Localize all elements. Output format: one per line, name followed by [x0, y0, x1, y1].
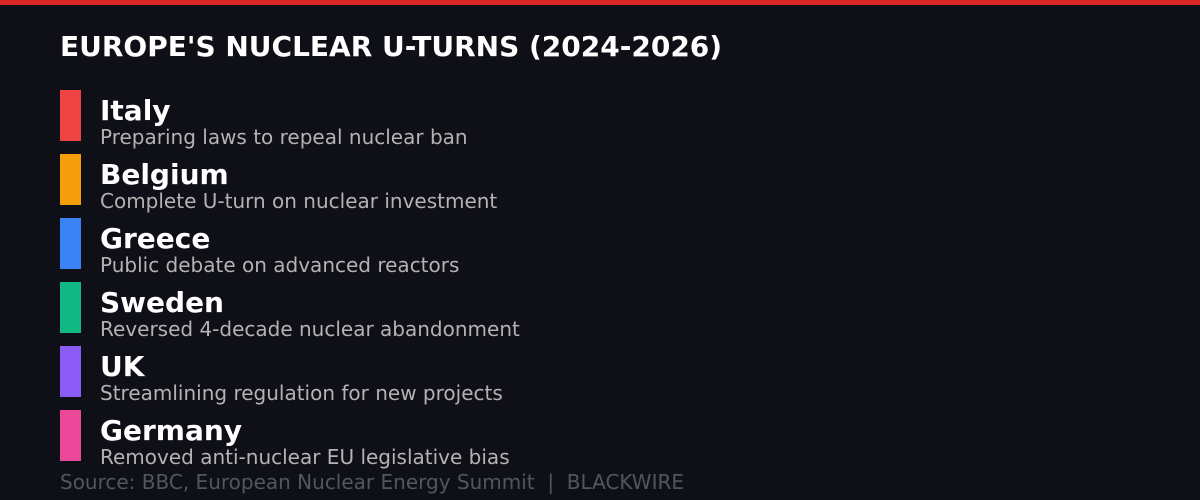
- footer source: Source: BBC, European Nuclear Energy Summit | BLACKWIRE: [60, 470, 684, 494]
- row: Italy: Italy: [100, 94, 171, 127]
- row: Sweden: Reversed 4-decade nuclear abandonment: [100, 317, 520, 341]
- row: UK: UK: [100, 350, 144, 383]
- row: UK: Streamlining regulation for new projects: [100, 381, 503, 405]
- row: Greece: [60, 218, 459, 277]
- row: Germany: Germany: [100, 414, 242, 447]
- row: Italy: [60, 90, 468, 149]
- title: EUROPE'S NUCLEAR U-TURNS (2024-2026): [60, 30, 722, 63]
- top accent bar: [0, 0, 1200, 5]
- row: Italy: Preparing laws to repeal nuclear ban: [100, 125, 468, 149]
- row: Belgium: Belgium: [100, 158, 229, 191]
- row: Belgium: [60, 154, 497, 213]
- row: UK: [60, 346, 503, 405]
- row: Sweden: [60, 282, 520, 341]
- row: Germany: Removed anti-nuclear EU legislative bias: [100, 445, 510, 469]
- row: Greece: Greece: [100, 222, 210, 255]
- row: Belgium: Complete U-turn on nuclear investment: [100, 189, 497, 213]
- row: Germany: [60, 410, 510, 469]
- row: Sweden: Sweden: [100, 286, 224, 319]
- row: Greece: Public debate on advanced reactors: [100, 253, 459, 277]
